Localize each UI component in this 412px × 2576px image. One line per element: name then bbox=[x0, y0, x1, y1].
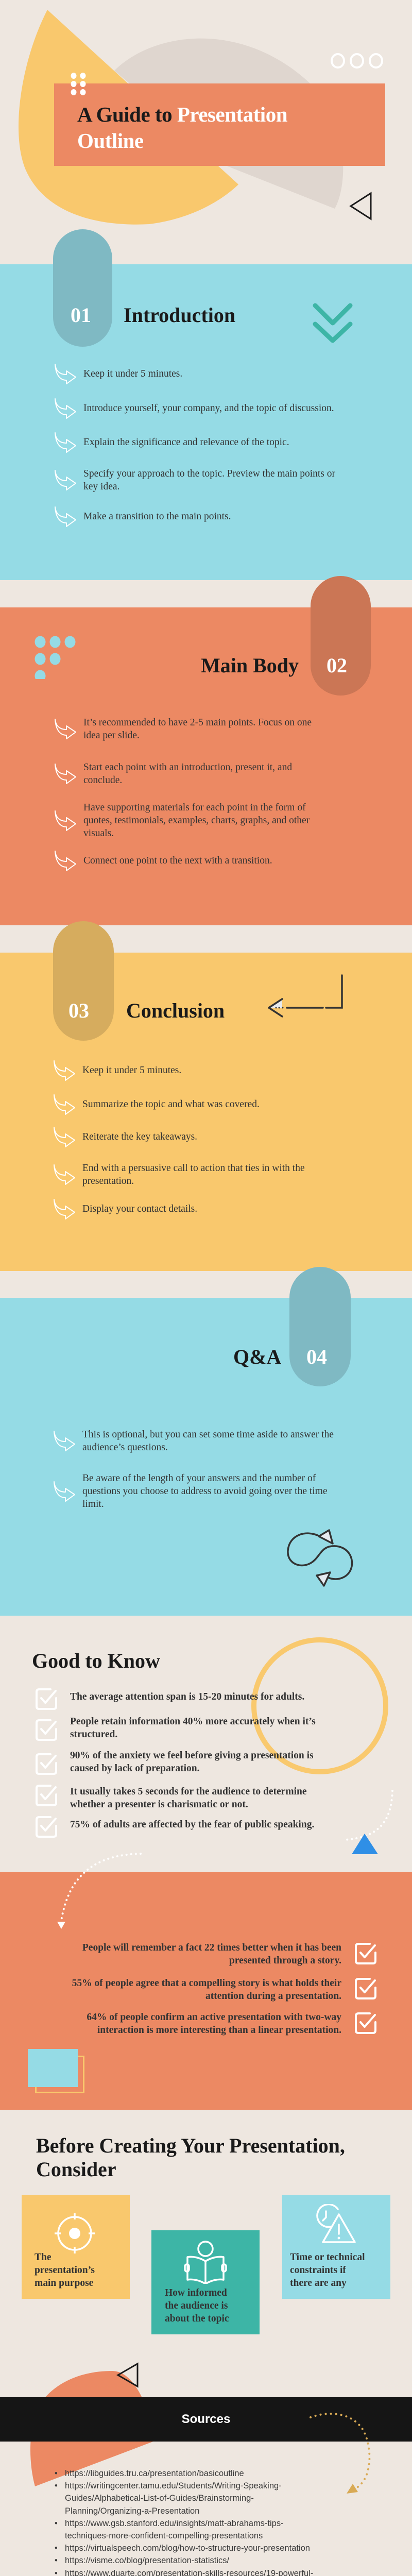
panel: story stats bbox=[0, 1872, 412, 2110]
sources list: • bbox=[55, 2481, 58, 2490]
header: title banner bbox=[54, 83, 385, 166]
number 02: 02 bbox=[327, 654, 347, 677]
fact list: caused by lack of preparation. bbox=[70, 1763, 200, 1774]
card: audience: How informed bbox=[165, 2287, 227, 2298]
card: constraints: constraints if bbox=[290, 2265, 346, 2276]
bullet list: Explain the significance and relevance of the topic. bbox=[83, 437, 289, 448]
sources list: https://writingcenter.tamu.edu/Students/Writing-Speaking- bbox=[65, 2481, 282, 2490]
stat list: attention during a presentation. bbox=[205, 1991, 341, 2002]
card: audience: about the topic bbox=[165, 2313, 229, 2324]
pill 03 bbox=[53, 921, 114, 1041]
icon: white dots bbox=[71, 73, 85, 95]
bullet list: End with a persuasive call to action that ties in with the bbox=[82, 1163, 305, 1174]
sources list bbox=[55, 2469, 313, 2576]
sources heading band: Sources bbox=[182, 2412, 230, 2426]
section: good to know bbox=[32, 1637, 393, 1854]
sources list: https://libguides.tru.ca/presentation/basicoutline bbox=[65, 2469, 244, 2478]
number 04: 04 bbox=[306, 1345, 327, 1368]
fact list bbox=[36, 1688, 316, 1838]
panel: introduction bbox=[0, 264, 412, 580]
stat list: 55% of people agree that a compelling story is what holds their bbox=[72, 1978, 341, 1989]
heading before creating bbox=[36, 2134, 345, 2181]
bullet list: Connect one point to the next with a transition. bbox=[83, 855, 272, 866]
icon: double chevron bbox=[313, 303, 352, 343]
bullet list: Introduce yourself, your company, and the topic of discussion. bbox=[83, 403, 334, 414]
bullet list: visuals. bbox=[83, 828, 114, 839]
sources list: • bbox=[55, 2469, 58, 2478]
fact list: 90% of the anxiety we feel before giving a presentation is bbox=[70, 1750, 314, 1761]
title: Outline bbox=[77, 129, 144, 152]
sources list: techniques-more-confident-compelling-presentations bbox=[65, 2531, 263, 2540]
bullet list: audience’s questions. bbox=[82, 1442, 168, 1453]
heading main body: Main Body bbox=[201, 654, 299, 677]
bullet list bbox=[54, 1429, 334, 1510]
icon: teal dots bbox=[35, 636, 75, 679]
bullet list: Display your contact details. bbox=[82, 1204, 197, 1214]
bullet list bbox=[55, 364, 335, 527]
card: main purpose: main purpose bbox=[35, 2278, 93, 2289]
bullet list: presentation. bbox=[82, 1176, 134, 1187]
bullet list: Start each point with an introduction, present it, and bbox=[83, 762, 292, 773]
pill 04 bbox=[289, 1267, 351, 1386]
bullet list bbox=[54, 1060, 305, 1219]
fact list: The average attention span is 15-20 minutes for adults. bbox=[70, 1691, 304, 1702]
arrow: dotted down bbox=[57, 1853, 142, 1929]
card: main purpose: presentation’s bbox=[35, 2265, 95, 2276]
bullet list: conclude. bbox=[83, 775, 122, 786]
icon: triangle bbox=[349, 192, 372, 221]
heading conclusion: Conclusion bbox=[126, 999, 225, 1022]
bullet list: Reiterate the key takeaways. bbox=[82, 1131, 197, 1142]
stat list: 64% of people confirm an active presentation with two-way bbox=[87, 2012, 341, 2023]
sources list: Guides/Alphabetical-List-of-Guides/Brainstorming- bbox=[65, 2494, 254, 2503]
fact list: People retain information 40% more accurately when it’s bbox=[70, 1716, 316, 1727]
fact list: It usually takes 5 seconds for the audience to determine bbox=[70, 1786, 307, 1797]
icon: target bbox=[55, 2213, 95, 2253]
bullet list: It’s recommended to have 2-5 main points. Focus on one bbox=[83, 717, 312, 728]
card: constraints bbox=[282, 2195, 390, 2299]
bullet list: Specify your approach to the topic. Preview the main points or bbox=[83, 468, 335, 479]
stat list bbox=[72, 1942, 376, 2036]
pill 02 bbox=[311, 576, 371, 696]
stat list: People will remember a fact 22 times better when it has been bbox=[82, 1942, 341, 1953]
icon: reader bbox=[184, 2241, 227, 2284]
icon: clock and warning bbox=[316, 2204, 356, 2243]
sources list: • bbox=[55, 2556, 58, 2565]
bullet list: idea per slide. bbox=[83, 730, 140, 741]
decorative ring bbox=[251, 1637, 388, 1774]
bullet list: questions you choose to address to avoid going over the time bbox=[82, 1486, 328, 1497]
sources list: • bbox=[55, 2519, 58, 2528]
bullet list: Be aware of the length of your answers and the number of bbox=[82, 1473, 316, 1484]
bullet list: limit. bbox=[82, 1499, 104, 1510]
bullet list: Have supporting materials for each point in the form of bbox=[83, 802, 306, 813]
section: before creating bbox=[22, 2134, 390, 2334]
sources heading band bbox=[0, 2397, 412, 2442]
title bbox=[77, 103, 287, 152]
card: constraints: Time or technical bbox=[290, 2252, 365, 2263]
heading good to know: Good to Know bbox=[32, 1649, 160, 1672]
sources list: • bbox=[55, 2544, 58, 2553]
pill 01 bbox=[53, 229, 112, 347]
number 01: 01 bbox=[71, 303, 91, 327]
bullet list: Summarize the topic and what was covered. bbox=[82, 1099, 260, 1110]
heading before creating: Before Creating Your Presentation, bbox=[36, 2134, 345, 2157]
card: audience bbox=[151, 2230, 260, 2334]
card: audience: the audience is bbox=[165, 2300, 228, 2311]
sources list: https://virtualspeech.com/blog/how-to-structure-your-presentation bbox=[65, 2544, 310, 2553]
icon: turn arrow bbox=[268, 974, 343, 1018]
panel: conclusion bbox=[0, 953, 412, 1271]
title: A Guide to Presentation bbox=[77, 103, 287, 126]
decorative rectangles bbox=[28, 2049, 84, 2093]
stat list: presented through a story. bbox=[229, 1955, 341, 1966]
header decorative shapes bbox=[19, 10, 343, 225]
bullet list: Make a transition to the main points. bbox=[83, 511, 231, 522]
bullet list bbox=[55, 717, 312, 871]
icon: three circles bbox=[331, 53, 383, 69]
card: main purpose: The bbox=[35, 2252, 52, 2263]
bullet list: Keep it under 5 minutes. bbox=[82, 1065, 181, 1076]
icon: dotted curved arrow bbox=[309, 2413, 371, 2494]
card: main purpose bbox=[22, 2195, 130, 2299]
heading introduction: Introduction bbox=[124, 303, 235, 327]
stat list: interaction is more interesting than a linear presentation. bbox=[97, 2025, 341, 2036]
bullet list: This is optional, but you can set some time aside to answer the bbox=[82, 1429, 334, 1440]
icon: dotted curve and blue triangle bbox=[346, 1790, 393, 1854]
panel: main body bbox=[0, 607, 412, 925]
sources list: https://visme.co/blog/presentation-statistics/ bbox=[65, 2556, 229, 2565]
fact list: 75% of adults are affected by the fear of public speaking. bbox=[70, 1819, 314, 1830]
fact list: whether a presenter is charismatic or not. bbox=[70, 1799, 248, 1810]
bullet list: key idea. bbox=[83, 481, 119, 492]
sources list: https://www.gsb.stanford.edu/insights/matt-abrahams-tips- bbox=[65, 2519, 284, 2528]
sources list: Planning/Organizing-a-Presentation bbox=[65, 2506, 199, 2516]
panel: Q&A bbox=[0, 1298, 412, 1616]
bullet list: Keep it under 5 minutes. bbox=[83, 368, 182, 379]
icon: loop arrows bbox=[287, 1529, 353, 1587]
icon: triangle bbox=[116, 2362, 138, 2388]
fact list: structured. bbox=[70, 1729, 117, 1740]
number 03: 03 bbox=[68, 999, 89, 1022]
decorative orange sector bbox=[30, 2371, 153, 2486]
bullet list: quotes, testimonials, examples, charts, graphs, and other bbox=[83, 815, 310, 826]
heading before creating: Consider bbox=[36, 2158, 116, 2181]
heading Q&A: Q&A bbox=[233, 1345, 281, 1368]
card: constraints: there are any bbox=[290, 2278, 347, 2289]
